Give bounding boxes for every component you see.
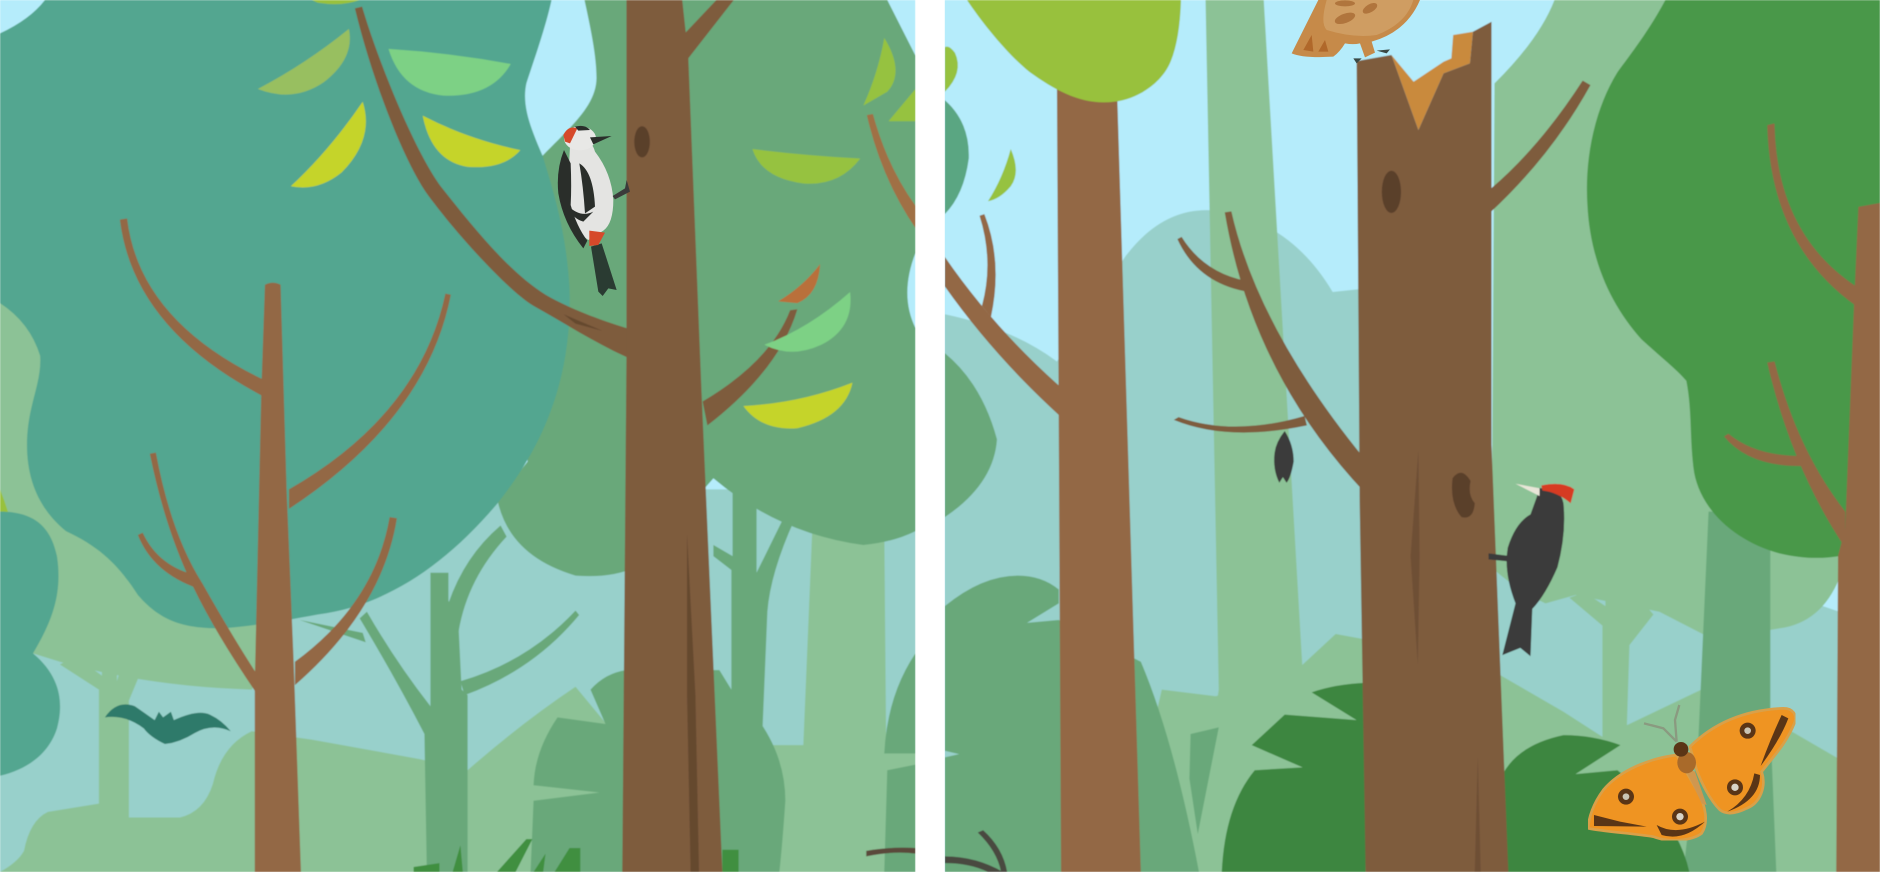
teal blob [945, 100, 969, 214]
belly [567, 141, 613, 240]
upper left branch [120, 219, 263, 396]
icon: spotted woodpecker [558, 126, 630, 296]
branch [448, 526, 507, 631]
beak [590, 136, 612, 144]
top right branch [682, 0, 734, 58]
tall pale trunk [1192, 0, 1306, 872]
large green canopy [1587, 0, 1880, 558]
lower left branch [150, 453, 258, 695]
black crown [575, 126, 590, 131]
forest ground [1120, 634, 1839, 872]
tree hole upper [1382, 171, 1401, 213]
panel: left forest scene [0, 0, 915, 872]
middle green tree [300, 526, 579, 872]
twig [1724, 434, 1803, 466]
leaf [752, 149, 860, 184]
beak [1516, 484, 1540, 496]
left branch [1225, 211, 1364, 492]
twig [1177, 237, 1249, 292]
panel: right forest scene [940, 0, 1880, 872]
black wing [579, 163, 595, 213]
trunk [255, 283, 301, 872]
low dark twig [978, 830, 1007, 872]
trunk [1357, 22, 1508, 872]
low dark branch [945, 856, 1003, 872]
branch bark mark [564, 314, 602, 331]
lime canopy [967, 0, 1181, 102]
leaf [258, 29, 350, 95]
wing mark [1657, 822, 1705, 837]
wing mark [1727, 773, 1760, 812]
body outline [1292, 0, 1420, 57]
leaf [291, 102, 366, 188]
inner body [1323, 0, 1413, 36]
low dark twig [866, 848, 915, 856]
middle background canopy [498, 0, 915, 576]
leaf [423, 116, 520, 167]
far right branch [867, 114, 915, 228]
spot [1335, 0, 1355, 6]
green bush [531, 670, 785, 872]
eye spot [1672, 809, 1688, 825]
left mid blob [945, 353, 997, 517]
tree hole [634, 126, 650, 157]
mid green wedge [1189, 727, 1219, 834]
broken trunk inner wood [1391, 32, 1473, 130]
wing mark [1761, 715, 1788, 766]
left mid bush [945, 576, 1199, 872]
large teal canopy [0, 0, 570, 628]
wing bar [567, 205, 593, 222]
spot [1333, 10, 1357, 26]
thorax [1677, 752, 1696, 773]
tree: right brown tree [1724, 123, 1880, 872]
leaf [988, 149, 1016, 201]
antenna [1644, 705, 1679, 742]
foot [613, 180, 630, 199]
upper right branch [289, 294, 451, 509]
red crest [1541, 484, 1574, 503]
background pale tree [60, 662, 138, 818]
red cap [563, 127, 577, 143]
bark stripe [1475, 756, 1481, 872]
grass blade [555, 848, 580, 872]
icon: orange butterfly [1588, 705, 1795, 840]
icon: perched owl [1292, 0, 1420, 63]
low twig [1174, 416, 1307, 433]
long left branch [355, 7, 626, 357]
claw [1377, 49, 1390, 53]
right branch [703, 309, 797, 425]
dark green bush right [1501, 735, 1689, 872]
grass blade [497, 839, 532, 872]
pale misty canopy [945, 210, 1839, 872]
lime blob [0, 490, 8, 512]
leaf [388, 49, 511, 96]
leaf [945, 47, 958, 92]
spot [1361, 1, 1379, 16]
big branch [945, 257, 1060, 416]
trunk stripe [687, 534, 699, 872]
tree: left brown tree [945, 83, 1141, 872]
claw [1353, 58, 1362, 63]
trunk [1836, 203, 1880, 872]
tree: central broken tree [1174, 22, 1590, 872]
small branch [980, 214, 996, 317]
upper branch [1767, 123, 1856, 306]
head [1674, 742, 1688, 757]
trunk [1057, 83, 1141, 872]
red vent [589, 231, 605, 246]
tree hole lower [1452, 473, 1475, 518]
black back [558, 150, 587, 248]
tail [591, 243, 617, 296]
ground right [773, 744, 916, 810]
trunk [622, 0, 722, 872]
teal bush left [0, 512, 60, 776]
pale distant tree [1569, 592, 1653, 740]
foot [1489, 553, 1511, 562]
leaf [888, 89, 915, 121]
twig [300, 620, 366, 642]
grass blade [453, 845, 463, 872]
icon: flying bat [105, 704, 231, 744]
tree: small brown tree [120, 219, 451, 872]
grass [414, 839, 739, 872]
sky [940, 0, 1880, 872]
bark stripe [1411, 450, 1420, 665]
eye spot [1618, 789, 1634, 805]
light green canopy [1492, 0, 1839, 640]
twig [138, 533, 198, 588]
eye spot [1727, 779, 1743, 795]
leaf [743, 383, 852, 428]
head [564, 126, 596, 150]
tree: large brown tree [355, 0, 797, 872]
tail stripe [1303, 35, 1328, 52]
abdomen [1685, 768, 1707, 805]
trunk [360, 573, 468, 872]
wing mark [1594, 815, 1647, 827]
lower right branch [295, 517, 397, 685]
right branch [1490, 81, 1590, 212]
leaves [258, 0, 915, 428]
bush right edge [884, 653, 915, 872]
sky [0, 0, 916, 490]
leaf [764, 292, 851, 352]
grass blade [722, 850, 739, 872]
second green tree [712, 493, 792, 726]
grass blade [534, 854, 546, 872]
pale tree trunk right [803, 533, 886, 746]
dark green bush left [1222, 683, 1366, 872]
icon: hanging bat [1274, 431, 1294, 483]
far left pale canopy [0, 303, 282, 690]
leaf [312, 0, 360, 4]
icon: black woodpecker [1489, 484, 1574, 656]
branch [460, 611, 579, 695]
eye spot [1740, 723, 1756, 739]
upper right wing [1690, 708, 1795, 813]
misty background [0, 489, 915, 872]
grass blade [414, 863, 439, 872]
left wing [1588, 755, 1706, 840]
body [1502, 488, 1564, 656]
mid green trunk [1683, 512, 1776, 872]
lower branch [1767, 361, 1845, 548]
leaf [863, 38, 896, 106]
leaf [778, 264, 820, 303]
forest ground [0, 687, 623, 872]
